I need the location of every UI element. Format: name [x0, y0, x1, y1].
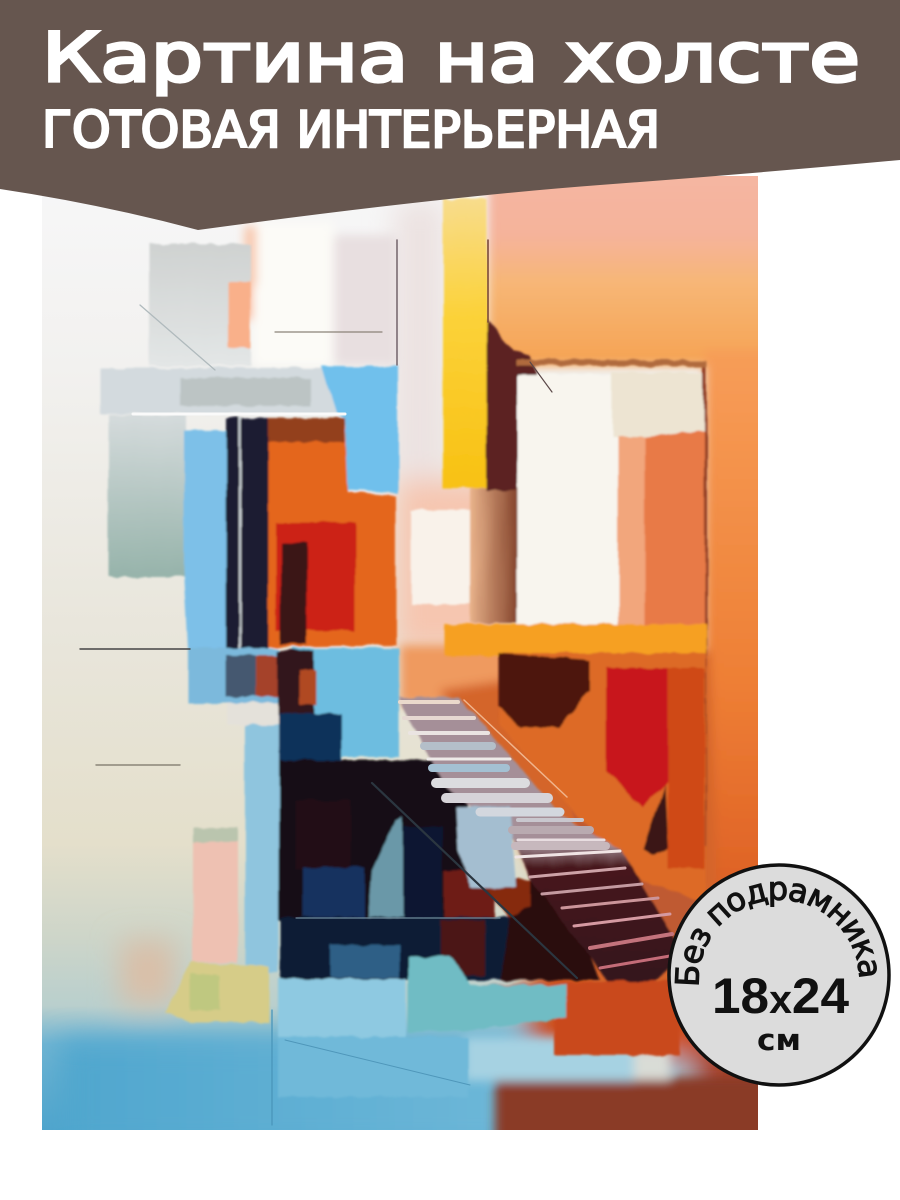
badge size: 18x24 [712, 968, 849, 1024]
blue band [188, 648, 280, 703]
upper grey-blue patch [150, 244, 250, 366]
blue column [184, 430, 226, 648]
banner: brown header with pointed bottom [0, 0, 900, 230]
stair side panel [456, 806, 516, 888]
lower-right orange room [498, 653, 706, 910]
white window [514, 372, 621, 628]
subtitle: ГОТОВАЯ ИНТЕРЬЕРНАЯ [42, 101, 660, 159]
navy under band [274, 714, 341, 760]
painting: abstract staircase canvas [42, 150, 790, 1150]
dark wedge [487, 320, 538, 490]
pink panel [192, 828, 238, 963]
dark column [226, 418, 268, 648]
yellow patch [165, 963, 269, 1022]
title: Картина на холсте [42, 19, 860, 98]
orange centre [265, 418, 396, 647]
stair treads [400, 702, 672, 968]
staircase body [399, 698, 682, 990]
badge unit: см [757, 1023, 801, 1057]
light blue lower panel [278, 979, 406, 1039]
navy lower band [278, 914, 511, 983]
lower dark triangle [500, 880, 600, 980]
yellow bar [443, 198, 487, 488]
white window in peach [411, 510, 470, 604]
pale vertical column [245, 722, 278, 973]
warm backing behind stairs [440, 650, 720, 1000]
badge: canvas size, no stretcher [667, 863, 891, 1087]
thin canvas lines [80, 240, 577, 1125]
badge arc text: Без подрамника [674, 881, 877, 985]
teal panel [408, 957, 567, 1032]
orange band [445, 624, 706, 656]
blue upper block [100, 368, 340, 414]
brown fade below yellow [470, 488, 518, 623]
black mass [278, 760, 468, 920]
grey-green panel [108, 415, 186, 577]
red-orange lower right [480, 980, 680, 1055]
